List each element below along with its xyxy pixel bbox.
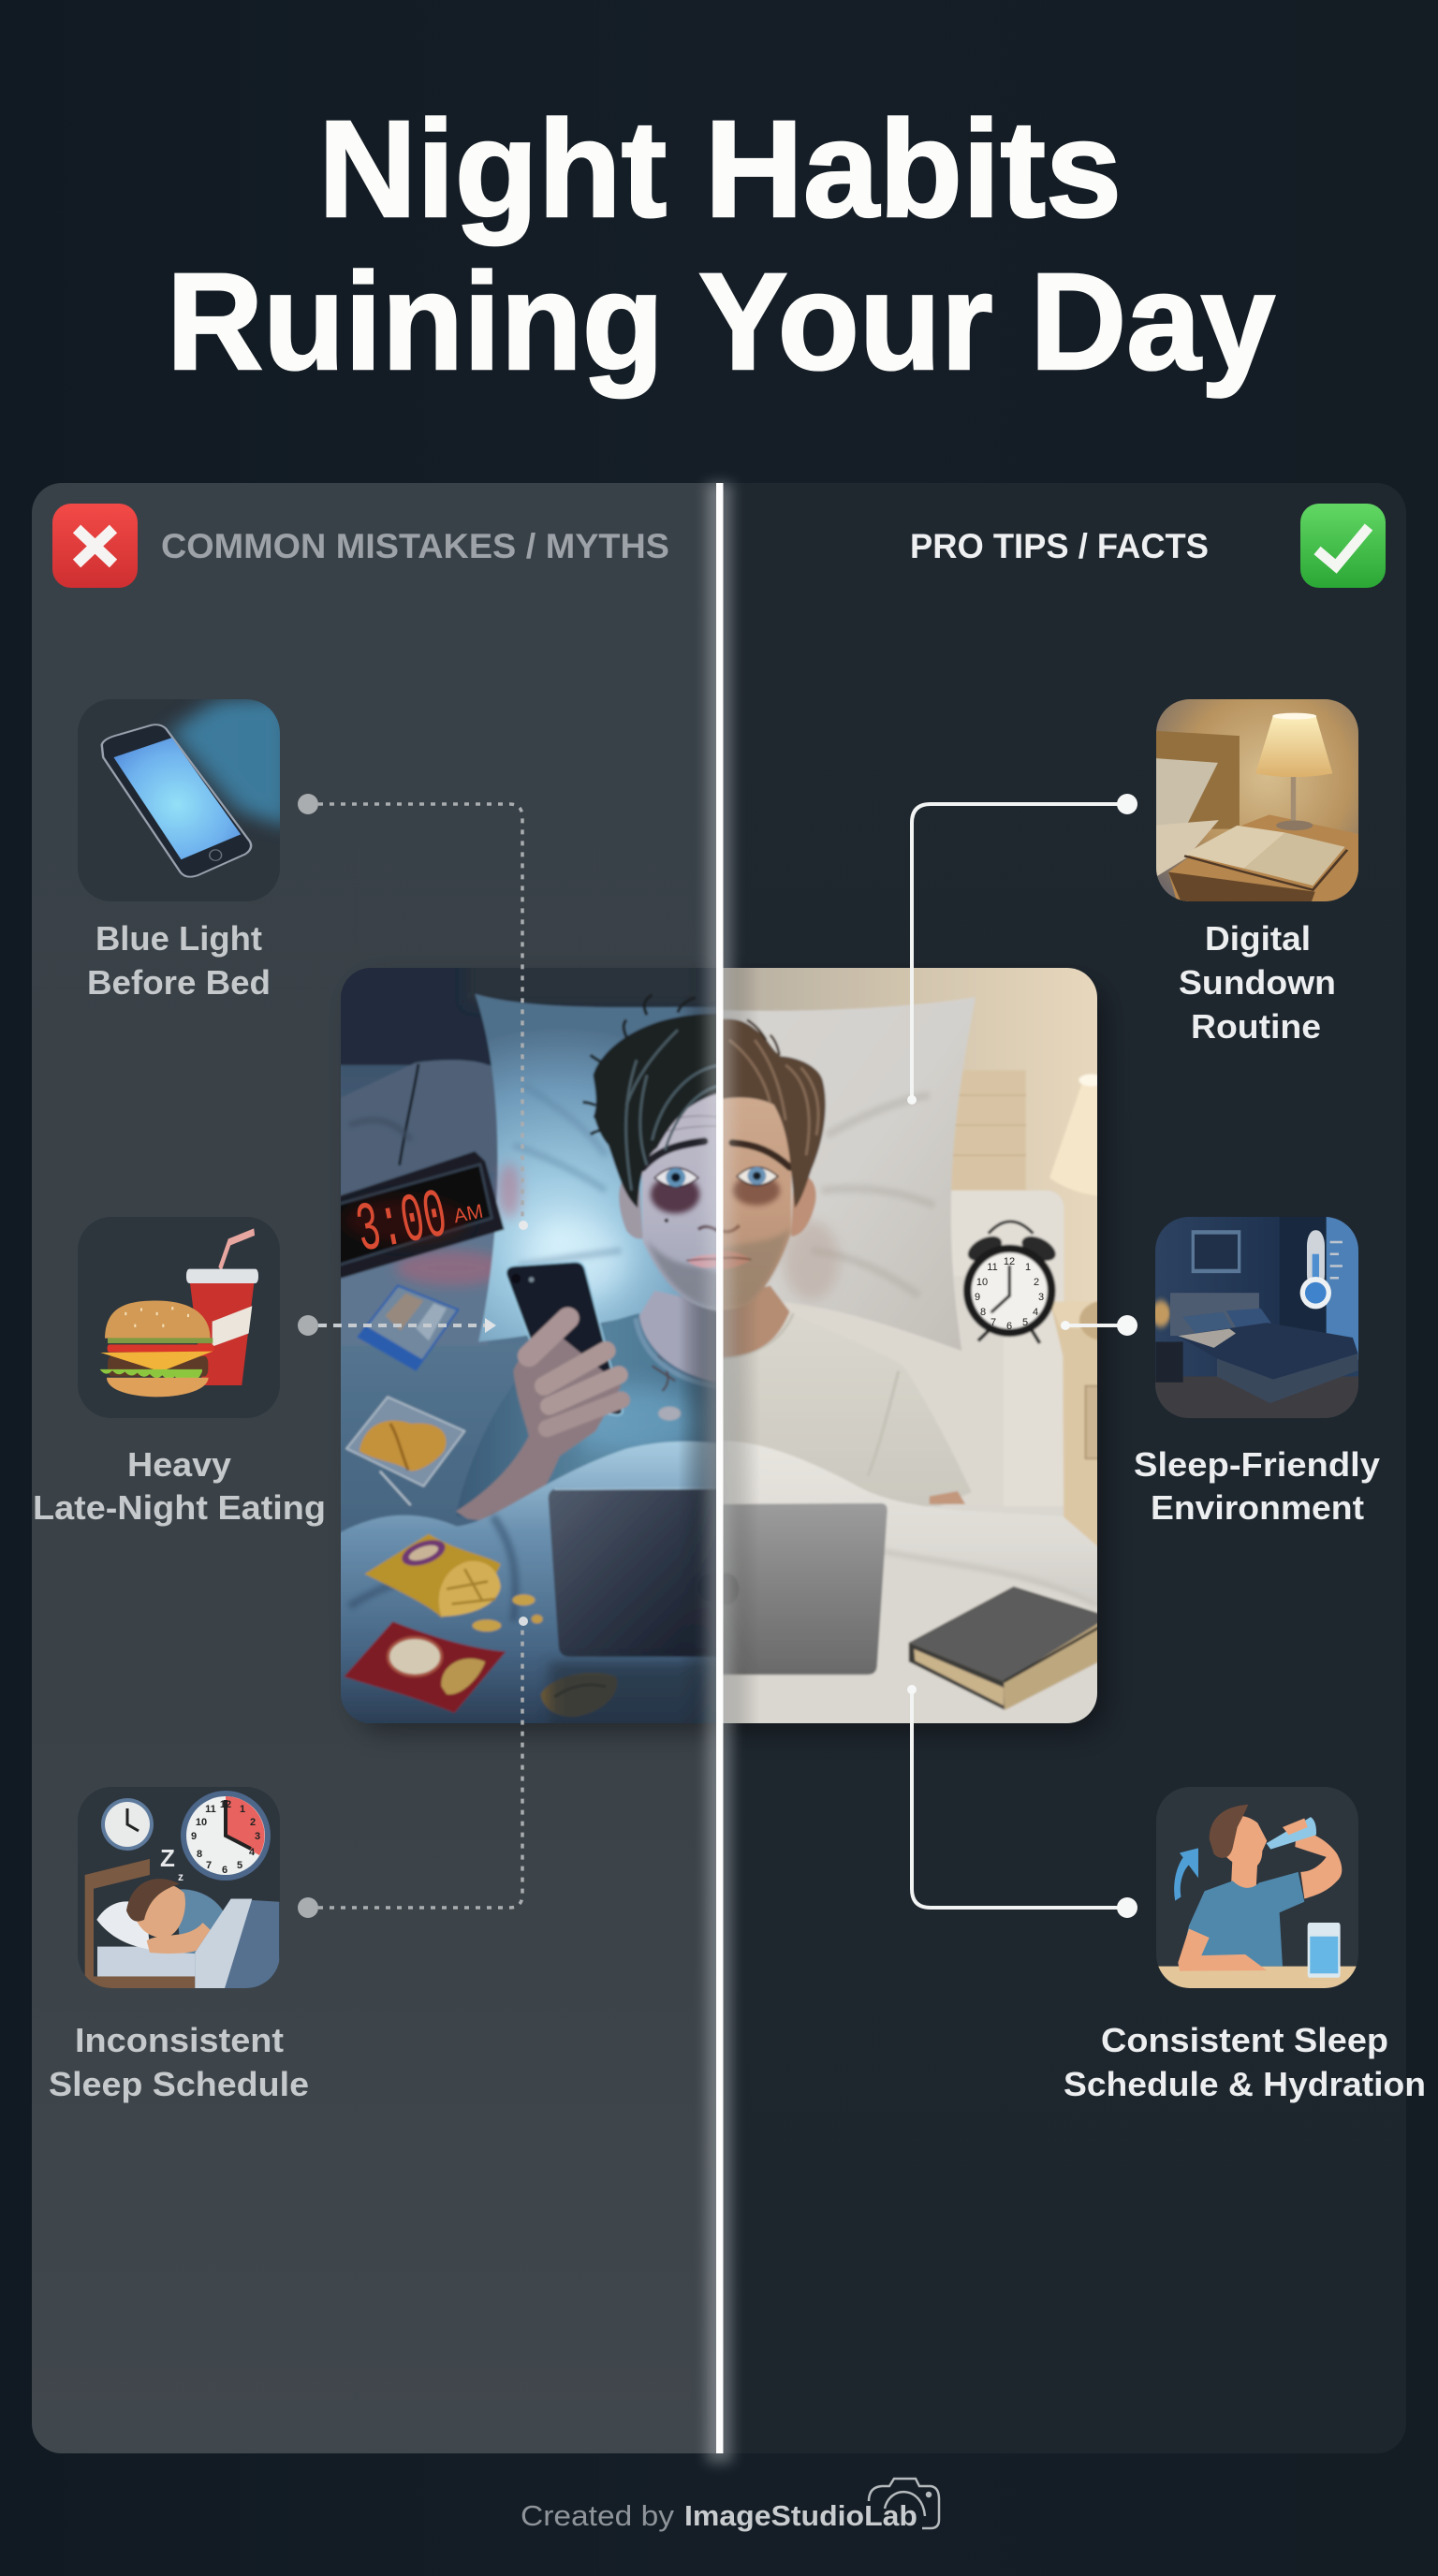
pillow — [1152, 758, 1218, 834]
label: inconsistent sleep schedule: Sleep Schedule — [49, 2065, 309, 2103]
lamp glow — [1152, 1300, 1170, 1327]
small clock — [101, 1798, 154, 1851]
label: consistent sleep schedule and hydration: Consistent Sleep — [1101, 2021, 1388, 2059]
large clock: 9 — [191, 1831, 197, 1842]
alarm clock numerals: 6 — [1006, 1321, 1012, 1332]
large clock — [181, 1791, 271, 1881]
torso in shirt — [457, 1312, 662, 1516]
icon card: sleeper and clocks — [78, 1787, 280, 1988]
large clock: 12 — [220, 1799, 231, 1810]
chip bag: red — [344, 1621, 506, 1713]
alarm clock numerals: 3 — [1038, 1292, 1044, 1303]
large clock: 6 — [222, 1865, 227, 1876]
alarm clock numerals: 10 — [976, 1277, 988, 1288]
icon card: burger and drink — [78, 1217, 280, 1418]
large clock: 5 — [237, 1860, 242, 1871]
main pillow — [475, 994, 722, 1341]
neat brown hair — [716, 1019, 826, 1208]
icon: camera outline — [869, 2479, 939, 2528]
digital alarm clock — [333, 1151, 505, 1278]
sleep z: Z — [160, 1844, 175, 1872]
torso in t-shirt — [736, 1387, 971, 1506]
icon: red cross badge — [52, 504, 138, 588]
label: inconsistent sleep schedule — [49, 2021, 309, 2103]
neck — [716, 1285, 790, 1358]
icon card: man drinking water — [1154, 1787, 1360, 1990]
alarm clock numerals: 12 — [1004, 1256, 1015, 1267]
open book — [1184, 826, 1285, 869]
footer credit: Created by — [521, 2499, 675, 2532]
3:00 AM display: AM — [452, 1201, 485, 1227]
shirt — [175, 1889, 225, 1955]
snack wrapper: clear with chips — [346, 1397, 464, 1486]
head — [1214, 1816, 1267, 1868]
bed frame — [85, 1859, 150, 1988]
arm — [147, 1923, 218, 1954]
icon card: sleeper and clocks: z — [178, 1870, 183, 1883]
phone body — [102, 724, 251, 877]
bed — [1178, 1323, 1358, 1380]
3:00 AM display: 3:00 — [350, 1178, 454, 1272]
large clock: 3 — [255, 1831, 260, 1842]
divider-side fade — [723, 968, 756, 1723]
blanket — [333, 1442, 722, 1741]
headboard — [1170, 1293, 1259, 1336]
label: inconsistent sleep schedule: Inconsistent — [75, 2021, 284, 2059]
nightstand — [1155, 1341, 1183, 1383]
alarm clock numerals: 5 — [1022, 1317, 1028, 1328]
wall picture — [1192, 1230, 1240, 1273]
resting arm — [1178, 1928, 1267, 1971]
footer credit: ImageStudioLab — [684, 2499, 917, 2532]
large clock: 4 — [249, 1847, 256, 1858]
bedside lamp — [1050, 1085, 1097, 1195]
label: sleep-friendly environment — [1134, 1445, 1380, 1527]
large clock: 8 — [197, 1849, 202, 1860]
laptop — [549, 1488, 722, 1657]
pillows — [1182, 1312, 1233, 1334]
headboard — [1150, 730, 1240, 829]
large clock: 7 — [206, 1860, 212, 1871]
divider-side fade — [680, 1005, 716, 1723]
label: consistent sleep schedule and hydration: Schedule & Hydration — [1064, 2065, 1426, 2103]
label: digital sundown routine: Digital — [1205, 919, 1311, 958]
large clock: 1 — [240, 1804, 245, 1815]
heading: pro tips / facts: PRO TIPS / FACTS — [910, 527, 1209, 565]
label: digital sundown routine: Sundown — [1179, 963, 1336, 1002]
chip bag: yellow — [364, 1534, 501, 1617]
large clock: 10 — [196, 1817, 207, 1828]
label: sleep-friendly environment: Environment — [1151, 1488, 1364, 1527]
label: blue light before bed — [87, 919, 271, 1002]
label: digital sundown routine — [1179, 919, 1336, 1046]
analog alarm clock — [963, 1222, 1060, 1343]
raised arm — [1295, 1830, 1342, 1899]
book — [1002, 1622, 1097, 1711]
laptop — [716, 1503, 888, 1675]
connector: digital sundown solid line — [907, 794, 1137, 1105]
heading: common mistakes / myths: COMMON MISTAKES / MYTHS — [161, 527, 669, 565]
alarm clock numerals: 4 — [1033, 1307, 1038, 1318]
messy dark hair — [582, 995, 722, 1208]
alarm clock numerals: 7 — [990, 1317, 996, 1328]
alarm clock numerals: 1 — [1025, 1262, 1031, 1273]
icon card: cool dark bedroom with thermometer — [1152, 1217, 1360, 1421]
pillow — [96, 1901, 150, 1950]
hair — [1210, 1805, 1248, 1858]
label: blue light before bed: Blue Light — [95, 919, 262, 958]
rested face — [716, 1097, 816, 1310]
label: sleep-friendly environment: Sleep-Friendly — [1134, 1445, 1380, 1484]
crumbs — [541, 1673, 617, 1717]
label: heavy late-night eating — [33, 1445, 326, 1527]
burger — [105, 1300, 211, 1339]
left pillow — [341, 1059, 496, 1189]
label: blue light before bed: Before Bed — [87, 963, 271, 1002]
main pillow — [716, 997, 976, 1351]
glass of water — [1308, 1923, 1341, 1978]
label: digital sundown routine: Routine — [1191, 1007, 1321, 1046]
curtains — [1280, 1217, 1329, 1360]
alarm clock numerals: 11 — [987, 1262, 998, 1273]
up arrow — [1177, 1857, 1191, 1899]
neck — [1231, 1854, 1257, 1890]
footer credit — [521, 2499, 917, 2532]
neck — [639, 1291, 722, 1383]
icon card: phone with blue light — [78, 696, 293, 901]
connector: blue light dotted line — [298, 794, 528, 1230]
panel: common mistakes background — [32, 483, 719, 2453]
alarm clock numerals: 9 — [975, 1292, 980, 1303]
glowing center divider — [707, 483, 732, 2463]
mattress — [950, 1189, 1064, 1507]
tired face — [619, 1092, 722, 1311]
thermometer — [1307, 1230, 1325, 1290]
icon card: lamp and open book — [1150, 699, 1361, 904]
soda cup — [220, 1232, 255, 1269]
lamp — [1291, 773, 1296, 822]
blanket — [716, 1441, 1109, 1612]
title — [167, 93, 1275, 399]
smartphone — [506, 1262, 623, 1415]
blue light glow — [169, 696, 293, 829]
table — [1154, 1967, 1360, 1990]
photo: bright right half — [723, 968, 1097, 1723]
alarm clock numerals — [975, 1256, 1044, 1332]
alarm clock numerals: 8 — [980, 1307, 986, 1318]
headboard — [952, 1070, 1026, 1191]
connector: late-night eating dashed arrow — [298, 1315, 496, 1336]
photo drop shadow — [356, 983, 1105, 1732]
icon: green check badge — [1300, 504, 1386, 588]
panel: pro tips background — [719, 483, 1406, 2453]
large clock: 11 — [205, 1804, 216, 1815]
connector: hydration solid line — [907, 1685, 1137, 1918]
connector: sleep-friendly solid line — [1061, 1315, 1137, 1336]
floor — [1154, 1376, 1360, 1421]
photo: dark left half — [341, 968, 716, 1723]
nightstand — [1050, 1308, 1097, 1546]
title: Night Habits — [318, 93, 1122, 246]
nightstand — [1168, 814, 1361, 904]
alarm clock numerals: 2 — [1034, 1277, 1039, 1288]
label: heavy late-night eating: Late-Night Eating — [33, 1488, 326, 1527]
bedding shade — [341, 1232, 494, 1345]
label: consistent sleep schedule and hydration — [1064, 2021, 1426, 2103]
snack wrapper: blue — [359, 1285, 458, 1369]
central split photo: tired vs rested man — [341, 968, 1107, 1739]
large clock: 2 — [250, 1817, 256, 1828]
head — [134, 1883, 185, 1938]
red clock glow — [395, 1251, 508, 1285]
shirt — [1180, 1872, 1304, 1967]
title: Ruining Your Day — [167, 245, 1275, 399]
bottle — [1267, 1817, 1316, 1850]
label: heavy late-night eating: Heavy — [127, 1445, 231, 1484]
arm and hand — [456, 1336, 622, 1524]
connector: inconsistent schedule dotted line — [298, 1617, 528, 1918]
blanket — [195, 1899, 279, 1988]
